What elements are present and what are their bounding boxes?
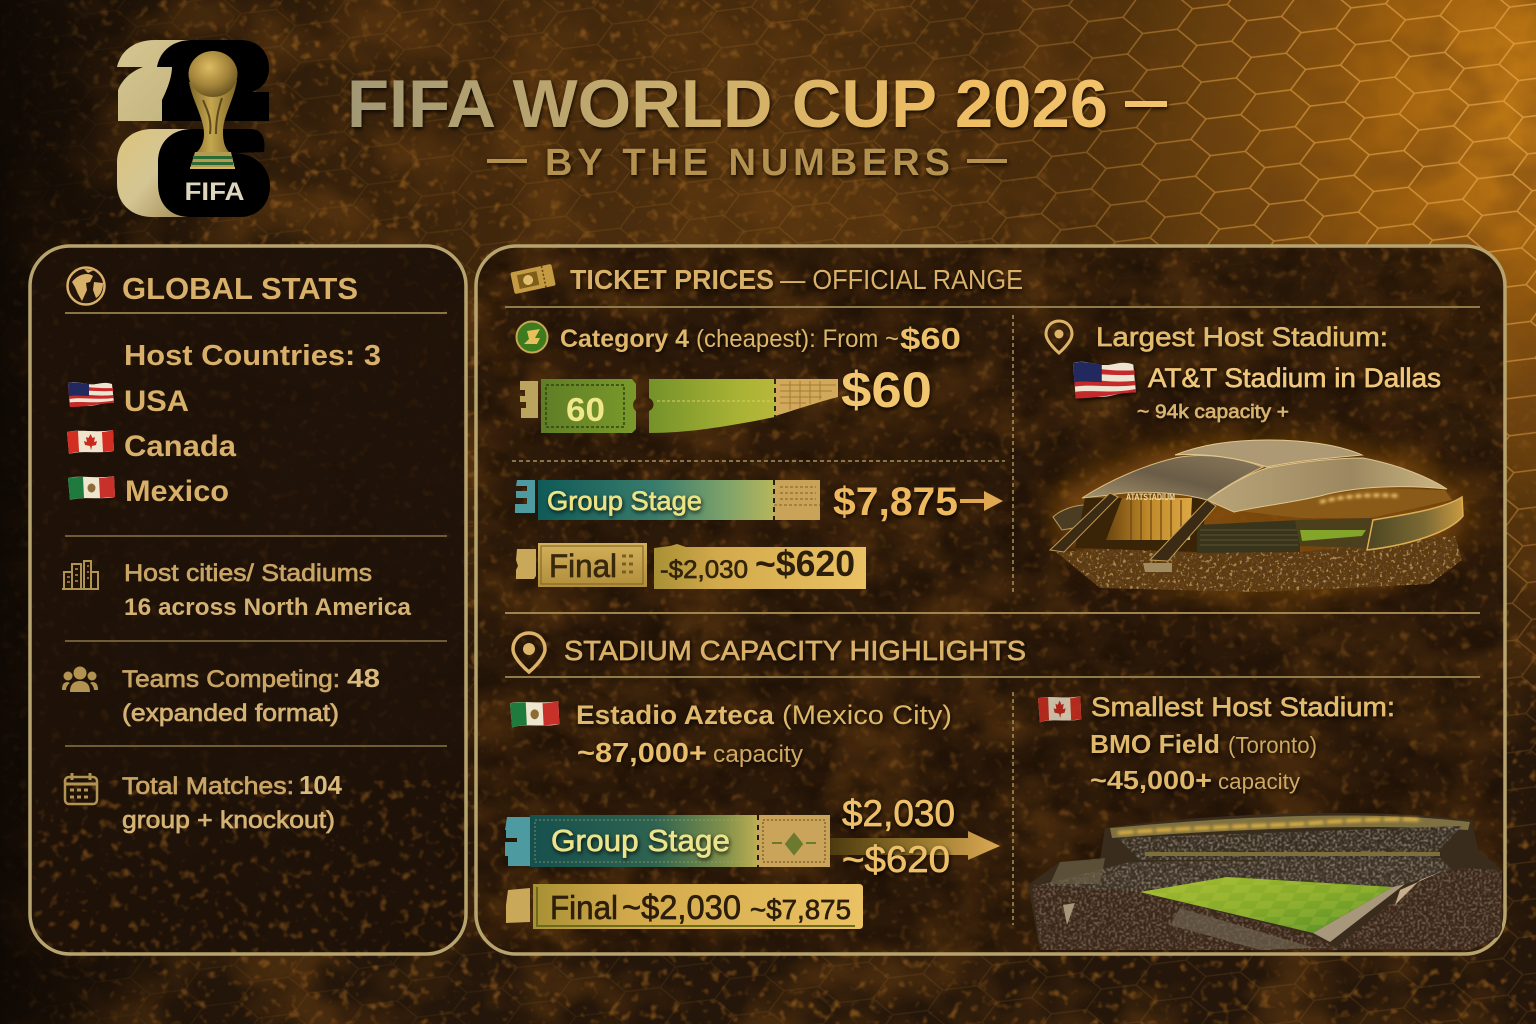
heading: stadium capacity highlights: STADIUM CAPACITY HIGHLIGHTS (564, 635, 1026, 666)
price range labels: $2,030 (842, 793, 955, 834)
illustration: BMO Field stadium (1028, 813, 1502, 955)
flag: Canada (1038, 696, 1081, 722)
ticket: group stage (505, 815, 830, 867)
icon: location pin (1046, 321, 1072, 353)
price range labels (842, 793, 955, 880)
text: smallest host stadium: (Toronto) (1228, 732, 1317, 758)
text: smallest host stadium: Smallest Host Stadium: (1091, 692, 1395, 722)
heading: ticket prices: TICKET PRICES (570, 264, 774, 295)
heading: ticket prices (570, 264, 1023, 295)
icon: location pin (513, 633, 545, 672)
icon: globe (68, 268, 104, 304)
price range labels: ~$620 (842, 839, 950, 880)
text: smallest host stadium: BMO Field (1090, 729, 1220, 759)
panel: ticket prices and stadiums (476, 246, 1505, 955)
host countries list: Mexico (125, 475, 229, 508)
icon: World Cup trophy (188, 51, 238, 169)
illustration: AT&T Stadium: ATATSTADIUM (1126, 492, 1175, 502)
stat: teams competing (122, 663, 380, 727)
stat: total matches: Total Matches: (122, 773, 294, 800)
heading: ticket prices: — OFFICIAL RANGE (780, 264, 1023, 295)
ticket: final: ~$2,030 (622, 889, 741, 927)
flag: Canada (67, 430, 114, 454)
category 4 label (560, 321, 961, 356)
host countries list (67, 340, 381, 508)
text: Estadio Azteca: (Mexico City) (782, 700, 952, 730)
largest stadium text: AT&T Stadium in Dallas (1148, 363, 1441, 393)
arrow (960, 491, 1003, 511)
category 4 label: (cheapest): From ~ (696, 325, 899, 353)
category 4 label: $60 (900, 321, 961, 356)
ticket: category 4 price (520, 362, 932, 433)
ticket: group stage price (515, 480, 820, 520)
flag: USA (68, 382, 114, 407)
icon: category 4 badge (516, 322, 548, 352)
text: Estadio Azteca (576, 700, 952, 768)
ticket: category 4 price: 60 (566, 391, 605, 428)
text: Estadio Azteca: capacity (713, 741, 803, 768)
title: FIFA WORLD CUP 2026 (347, 66, 1108, 142)
host countries list: Canada (124, 430, 236, 463)
icon: calendar (65, 773, 97, 804)
icon: ticket (510, 264, 556, 294)
category 4 label: Category 4 (560, 325, 689, 353)
text: smallest host stadium: capacity (1218, 769, 1300, 794)
text: Estadio Azteca: ~87,000+ (577, 737, 707, 768)
illustration: AT&T Stadium (1050, 440, 1470, 596)
stat: teams competing: (expanded format) (122, 700, 339, 727)
ticket: final: Final (550, 889, 618, 926)
ticket: final price (516, 543, 866, 589)
text: Estadio Azteca: Estadio Azteca (576, 700, 775, 730)
stat: total matches (122, 770, 343, 834)
ticket: group stage price: Group Stage (547, 486, 702, 516)
arrow: price range (830, 831, 1000, 860)
stat: teams competing: Teams Competing: (122, 666, 340, 693)
icon: people (62, 666, 98, 692)
text: smallest host stadium: ~45,000+ (1090, 765, 1212, 795)
flag: USA large (1073, 362, 1136, 398)
logo: FIFA 26 with trophy (117, 40, 270, 217)
ticket: final (506, 884, 863, 929)
text: smallest host stadium (1090, 692, 1395, 795)
stat: host cities: 16 across North America (124, 594, 412, 621)
ticket: group stage: Group Stage (551, 823, 730, 858)
subtitle: BY THE NUMBERS (545, 142, 950, 184)
ticket: final price: -$2,030 (660, 556, 748, 584)
stat: teams competing: 48 (347, 663, 380, 693)
panel: global stats (30, 246, 466, 954)
ticket: final price: Final (549, 548, 617, 584)
flag: Mexico (68, 476, 115, 500)
host countries list: Host Countries: 3 (124, 340, 381, 372)
logo wordmark: FIFA (184, 178, 244, 206)
ticket: category 4 price: $60 (841, 362, 932, 418)
largest stadium text: Largest Host Stadium: (1096, 322, 1388, 352)
stat: host cities (124, 560, 412, 621)
largest stadium text: ~ 94k capacity + (1137, 402, 1289, 423)
ticket: final: ~$7,875 (750, 894, 851, 925)
price: 7,875: $7,875 (833, 480, 958, 524)
largest stadium text (1073, 322, 1441, 423)
stat: total matches: 104 (299, 770, 343, 800)
icon: buildings (62, 561, 99, 589)
ticket: final price: ~$620 (755, 543, 855, 584)
flag: Mexico (510, 701, 559, 728)
heading: global stats: GLOBAL STATS (122, 271, 358, 306)
host countries list: USA (124, 385, 189, 418)
stat: total matches: group + knockout) (122, 807, 335, 834)
stat: host cities: Host cities/ Stadiums (124, 560, 372, 587)
